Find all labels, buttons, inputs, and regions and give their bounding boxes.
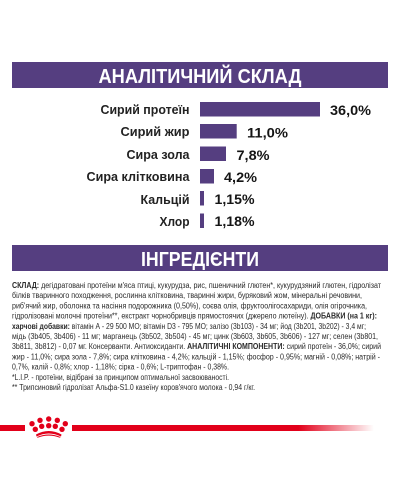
text block: composition details — [12, 281, 381, 392]
heading: analytical composition — [12, 62, 388, 88]
row: crude fibre: 4,2% — [224, 170, 257, 185]
row: crude ash: 7,8% — [236, 148, 270, 163]
text block: composition details: білків тваринного походження, рослинна клітковина, тваринні жири, буряковий жом, мінеральні речовини, — [12, 291, 362, 300]
row: crude fat: 11,0% — [247, 126, 288, 140]
row: crude protein: 36,0% — [330, 103, 371, 118]
row: crude fibre — [86, 169, 257, 185]
row: crude fat — [120, 124, 288, 140]
row: crude protein — [100, 102, 371, 118]
row: crude protein: Сирий протеїн — [100, 103, 190, 117]
row: calcium: Кальцій — [140, 193, 190, 207]
text block: composition details: *L.I.P. - протеїни, відібрані за принципом оптимальної засвоюваності. — [12, 373, 229, 382]
text block: composition details: риб'ячий жир, оболонка та насіння подорожника (0,50%), соєва олія, фруктоолігосахариди, олія огірочника, — [12, 301, 367, 310]
row: crude fat: Сирий жир — [120, 125, 190, 139]
text block: composition details: 0,7%, калій - 0,8%; хлор - 1,18%; сірка - 0,6%; L-триптофан - 0,38%. — [12, 363, 229, 372]
row: crude fibre: Сира клітковина — [86, 170, 191, 184]
heading: analytical composition: АНАЛІТИЧНИЙ СКЛАД — [98, 64, 302, 88]
text block: composition details: гідролізовані молочні протеїни**, екстракт чорнобривців прямостоячих (джерело лютеїну). ДОБАВКИ (на 1 кг): — [12, 312, 377, 321]
icon: royal crown logo — [29, 416, 68, 438]
heading: ingredients — [12, 245, 388, 271]
row: crude ash: Сира зола — [126, 148, 191, 162]
text block: composition details: ** Трипсиновий гідролізат Альфа-S1.0 казеїну коров'ячого молока - 0,94 г/кг. — [12, 383, 255, 392]
row: chlorine: Хлор — [160, 215, 190, 229]
row: crude ash — [126, 146, 270, 163]
row: calcium — [140, 191, 254, 207]
heading: ingredients: ІНГРЕДІЄНТИ — [141, 248, 259, 271]
row: calcium: 1,15% — [214, 192, 254, 207]
row: chlorine — [160, 214, 254, 229]
bar chart: composition values — [86, 102, 371, 229]
row: chlorine: 1,18% — [214, 214, 254, 229]
text block: composition details: 3b811, 3b812) - 0,07 мг. Консерванти. Антиоксиданти. АНАЛІТИЧНІ КОМПОНЕНТИ: сирий протеїн - 36,0%; сирий — [12, 342, 381, 351]
